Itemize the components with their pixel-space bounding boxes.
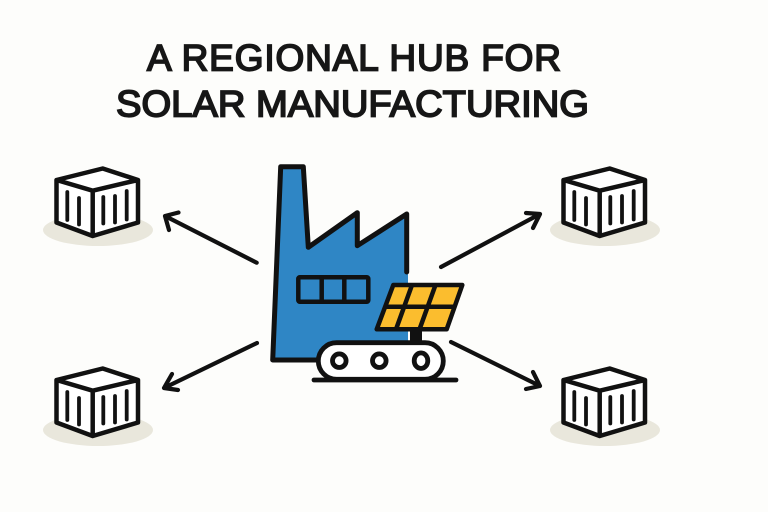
icon: factory [273, 167, 408, 360]
arrow: bottom right [451, 342, 540, 389]
factory window [298, 277, 368, 302]
icon: container bottom left [43, 368, 153, 446]
icon: container top right [550, 168, 660, 246]
arrow: bottom left [164, 343, 257, 390]
icon: solar panel [377, 285, 462, 344]
title: SOLAR MANUFACTURING [116, 84, 589, 124]
title: A REGIONAL HUB FOR [147, 38, 561, 78]
arrow: top left [165, 212, 257, 263]
icon: conveyor belt [314, 343, 456, 380]
title [116, 38, 589, 124]
icon: container bottom right [550, 368, 660, 446]
arrow: top right [441, 213, 540, 267]
icon: container top left [43, 168, 153, 246]
